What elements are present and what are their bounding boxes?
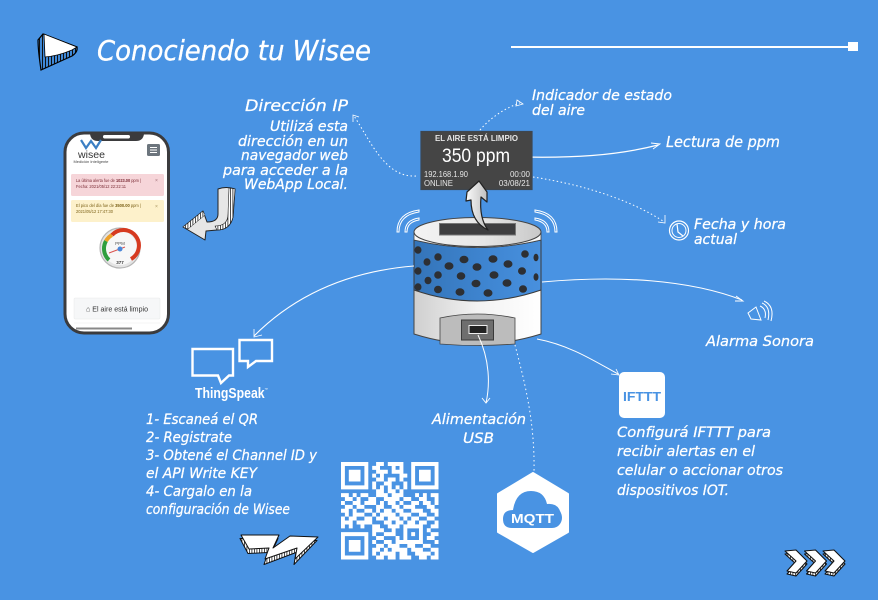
top lid bbox=[414, 218, 541, 248]
air holes bbox=[414, 246, 538, 297]
text: ThingSpeak steps: configuración de Wisee bbox=[146, 502, 290, 518]
alert: last alert bbox=[71, 174, 164, 196]
display: 03/08/21 bbox=[499, 179, 531, 188]
arrow: to alarm bbox=[542, 279, 743, 301]
label: date and time: Fecha y hora bbox=[694, 217, 786, 233]
label: air indicator: Indicador de estado bbox=[532, 88, 672, 104]
alert: daily peak: El pico del día fue de 3500.00 ppm | bbox=[76, 203, 141, 208]
front panel bbox=[440, 314, 515, 346]
ppm gauge: PPM bbox=[115, 241, 125, 246]
title: Conociendo tu Wisee bbox=[97, 34, 371, 67]
text: ThingSpeak steps: 4- Cargalo en la bbox=[146, 484, 252, 500]
text: IFTTT description bbox=[617, 425, 783, 499]
text: IFTTT description: celular o accionar otros bbox=[617, 463, 783, 479]
text: IP usage: para acceder a la bbox=[222, 163, 348, 179]
label: ppm reading: Lectura de ppm bbox=[666, 133, 780, 151]
text: ThingSpeak steps bbox=[146, 412, 318, 518]
arrow: to IFTTT bbox=[537, 339, 619, 375]
air status button: ⌂ El aire está limpio bbox=[86, 304, 148, 314]
display: ONLINE bbox=[424, 179, 453, 188]
wisee logo: Medición Inteligente bbox=[74, 159, 109, 164]
logo: IFTTT bbox=[619, 372, 665, 418]
arrow: to date and time bbox=[533, 177, 665, 223]
blue air band bbox=[414, 240, 541, 301]
text: IP usage bbox=[222, 119, 348, 193]
arrow: device to display bbox=[466, 181, 488, 230]
heading: IP address: Dirección IP bbox=[245, 96, 348, 115]
text: ThingSpeak steps: 2- Registrate bbox=[146, 430, 232, 446]
arrow: to ppm reading bbox=[522, 143, 660, 157]
wisee logo: wisee bbox=[77, 149, 105, 161]
label: USB power: Alimentación bbox=[431, 412, 526, 428]
device bbox=[397, 210, 557, 346]
QR code bbox=[341, 464, 438, 558]
phone bbox=[65, 133, 168, 333]
icon: speaker bbox=[748, 301, 772, 321]
text: ThingSpeak steps: 3- Obtené el Channel ID y bbox=[146, 448, 318, 464]
icon: zigzag arrow bbox=[240, 535, 318, 564]
text: IFTTT description: recibir alertas en el bbox=[617, 444, 755, 460]
arrow: to air indicator bbox=[480, 100, 523, 130]
label: alarm: Alarma Sonora bbox=[705, 334, 814, 350]
text: IP usage: Utilizá esta bbox=[270, 119, 348, 135]
icon: title play arrow bbox=[38, 34, 77, 70]
arrow: to MQTT bbox=[515, 345, 534, 472]
display: 192.168.1.90 bbox=[424, 170, 469, 179]
label: date and time: actual bbox=[694, 232, 737, 248]
label: USB power bbox=[431, 412, 526, 447]
text: IP usage: dirección en un bbox=[238, 134, 348, 150]
alert: daily peak: 2021/05/12 17:47:30 bbox=[76, 209, 114, 214]
text: ThingSpeak steps: el API Write KEY bbox=[146, 466, 258, 482]
arrow: to USB bbox=[478, 335, 490, 403]
text: IP usage: WebApp Local. bbox=[244, 177, 348, 193]
menu button bbox=[147, 144, 160, 156]
label: date and time bbox=[694, 217, 786, 248]
text: IFTTT description: dispositivos IOT. bbox=[617, 483, 729, 499]
phone notch bbox=[90, 134, 144, 141]
text: IP usage: navegador web bbox=[241, 148, 348, 164]
wisee logo bbox=[74, 140, 109, 164]
alert: last alert: Fecha: 2021/05/12 22:22:11 bbox=[76, 184, 127, 189]
lower body bbox=[414, 285, 541, 344]
alert: last alert: × bbox=[155, 178, 158, 184]
header rule bbox=[511, 42, 858, 51]
display: 00:00 bbox=[510, 170, 531, 179]
display: 350 ppm bbox=[442, 145, 510, 167]
alert: daily peak: × bbox=[155, 204, 158, 210]
arrow: to phone bbox=[183, 188, 235, 240]
label: air indicator: del aire bbox=[532, 103, 585, 119]
ppm gauge bbox=[100, 228, 140, 268]
arrow: to IP address bbox=[353, 115, 416, 176]
arrow: to ThingSpeak bbox=[254, 266, 414, 337]
alert: daily peak bbox=[71, 200, 164, 222]
label: air indicator bbox=[532, 88, 672, 119]
alert: last alert: La última alerta fue de 1023.00 ppm | bbox=[76, 178, 141, 183]
display: EL AIRE ESTÁ LIMPIO bbox=[435, 134, 518, 143]
text: IFTTT description: Configurá IFTTT para bbox=[617, 425, 771, 441]
ppm gauge: 377 bbox=[116, 260, 124, 265]
logo: ThingSpeak: ThingSpeak bbox=[195, 386, 277, 402]
text: ThingSpeak steps: 1- Escaneá el QR bbox=[146, 412, 258, 428]
icon: MQTT bbox=[498, 473, 568, 552]
logo: ThingSpeak: ™ bbox=[265, 387, 268, 392]
label: USB power: USB bbox=[463, 431, 494, 447]
icon: ThingSpeak bubbles bbox=[192, 340, 272, 383]
sound waves bbox=[397, 210, 557, 232]
display bbox=[421, 132, 532, 190]
icon: MQTT: MQTT bbox=[511, 512, 554, 526]
icon: next chevrons bbox=[785, 550, 845, 576]
logo: IFTTT: IFTTT bbox=[623, 389, 661, 404]
icon: clock bbox=[670, 221, 688, 240]
air status button bbox=[74, 298, 160, 319]
